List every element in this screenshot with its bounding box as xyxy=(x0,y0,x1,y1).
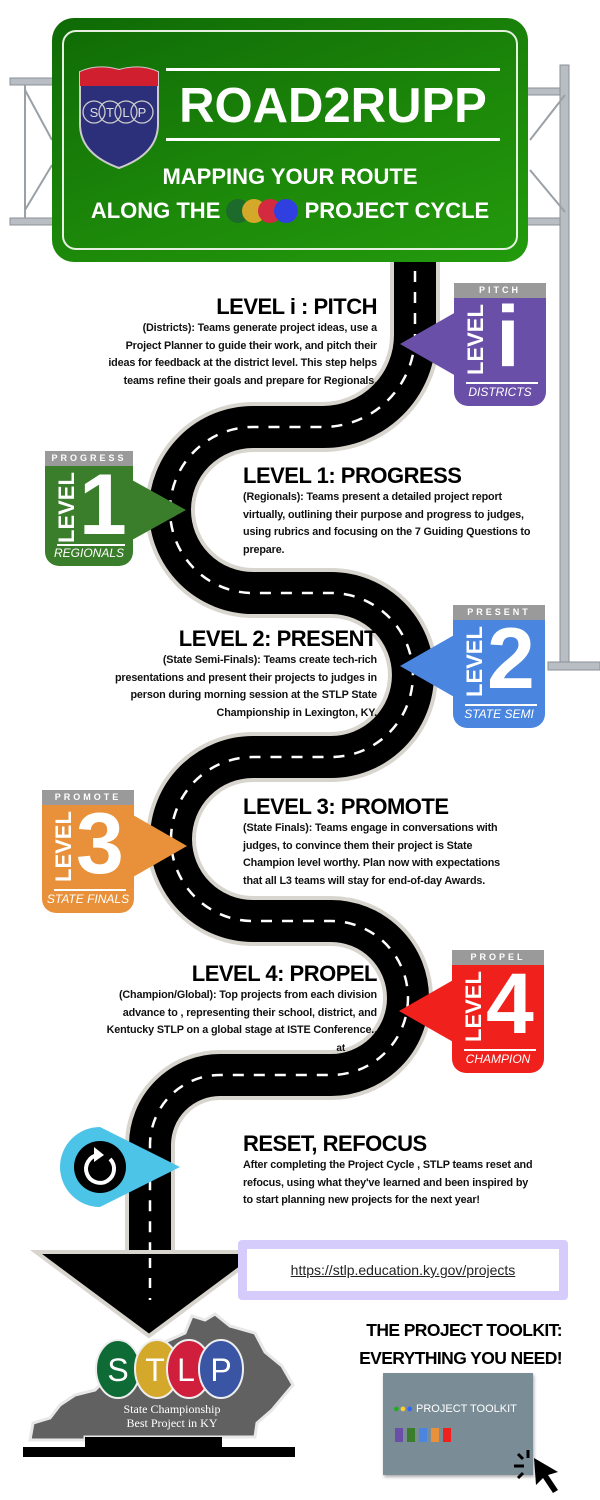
level 1 text: prepare. xyxy=(243,544,284,556)
level 1 text xyxy=(243,463,530,556)
badge: level 3: PROMOTE xyxy=(55,792,121,802)
level 4 text: at xyxy=(336,1042,345,1054)
level 1 text: using rubrics and focusing on the 7 Guiding Questions to xyxy=(243,526,530,538)
level 1 text: (Regionals): Teams present a detailed project report xyxy=(243,491,502,503)
kentucky trophy: T xyxy=(145,1352,165,1388)
badge: level 1: LEVEL xyxy=(54,472,79,543)
kentucky trophy: State Championship xyxy=(124,1402,220,1416)
reset text: After completing the Project Cycle , STLP teams reset and xyxy=(243,1159,532,1171)
badge: level 2 xyxy=(453,605,545,728)
icon: interstate shield: P xyxy=(138,105,146,120)
badge: level i: DISTRICTS xyxy=(468,385,532,399)
badge: level 1 xyxy=(45,451,133,566)
level 2 text: Championship in Lexington, KY. xyxy=(217,706,377,718)
badge: level i: i xyxy=(496,289,520,385)
badge: level 4: PROPEL xyxy=(470,952,526,962)
level 4 text: Kentucky STLP on a global stage at ISTE Conference.. xyxy=(107,1024,377,1036)
level i text xyxy=(108,294,378,386)
badge: level 4: CHAMPION xyxy=(466,1052,530,1066)
level 4 text: (Champion/Global): Top projects from each division xyxy=(119,989,377,1001)
level 1 text: virtually, outlining their purpose and progress to judges, xyxy=(243,508,524,520)
kentucky trophy: Best Project in KY xyxy=(126,1416,218,1430)
level 4 text: advance to , representing their school, district, and xyxy=(123,1006,377,1018)
level 3 text: (State Finals): Teams engage in conversations with xyxy=(243,822,497,834)
kentucky trophy: P xyxy=(210,1352,232,1388)
toolkit thumbnail: ●●● PROJECT TOOLKIT xyxy=(393,1403,517,1415)
url box: https://stlp.education.ky.gov/projects xyxy=(291,1262,515,1278)
badge: level 1: PROGRESS xyxy=(51,453,126,463)
badge: level 4 xyxy=(452,950,544,1073)
badge: level 3: 3 xyxy=(76,796,124,892)
reset text: to start planning new projects for the next year! xyxy=(243,1194,480,1206)
reset text xyxy=(243,1131,532,1206)
level 1 text: LEVEL 1: PROGRESS xyxy=(243,463,461,488)
badge: level i: LEVEL xyxy=(463,304,488,375)
subtitle: ALONG THE PROJECT CYCLE xyxy=(91,198,489,223)
kentucky trophy: S xyxy=(107,1352,129,1388)
icon: interstate shield: L xyxy=(122,105,130,120)
badge: level 3: LEVEL xyxy=(51,811,76,882)
badge: level 2: 2 xyxy=(487,611,535,707)
toolkit heading: THE PROJECT TOOLKIT: xyxy=(366,1320,562,1340)
header sign xyxy=(52,18,528,262)
level 2 text: (State Semi-Finals): Teams create tech-rich xyxy=(163,654,377,666)
level 3 text: LEVEL 3: PROMOTE xyxy=(243,794,449,819)
badge: level i: PITCH xyxy=(479,285,521,295)
badge: level 3: STATE FINALS xyxy=(47,892,129,906)
level i text: LEVEL i : PITCH xyxy=(216,294,377,319)
toolkit heading: EVERYTHING YOU NEED! xyxy=(359,1348,562,1368)
level i text: Project Planner to guide their work, and pitch their xyxy=(126,340,377,352)
sign structure: poles and trusses xyxy=(10,64,600,670)
subtitle xyxy=(91,164,489,223)
level 4 text xyxy=(107,961,377,1054)
icon: reset pin xyxy=(60,1127,180,1207)
icon: interstate shield: T xyxy=(106,105,114,120)
icon: interstate shield xyxy=(79,66,159,169)
level 3 text xyxy=(242,794,500,886)
badge: level 2: LEVEL xyxy=(462,626,487,697)
level 2 text: presentations and present their projects to judges in xyxy=(115,672,377,684)
badge: level 1: REGIONALS xyxy=(54,546,124,560)
toolkit thumbnail xyxy=(383,1373,533,1475)
level 2 text: person during morning session at the STLP State xyxy=(130,689,377,701)
kentucky trophy: L xyxy=(177,1352,195,1388)
big arrow xyxy=(36,1252,262,1336)
toolkit heading xyxy=(359,1320,562,1368)
subtitle: MAPPING YOUR ROUTE xyxy=(162,164,418,189)
icon: cursor xyxy=(514,1450,558,1493)
level 3 text: judges, to convince them their project is State xyxy=(243,840,472,852)
badge: level 2: STATE SEMI xyxy=(464,707,534,721)
badge: level 4: 4 xyxy=(486,956,534,1052)
url box xyxy=(238,1240,568,1300)
level 2 text: LEVEL 2: PRESENT xyxy=(179,626,377,651)
level i text: teams refine their goals and prepare for Regionals. xyxy=(124,374,377,386)
badge: level 4: LEVEL xyxy=(461,971,486,1042)
level 3 text: that all L3 teams will stay for end-of-day Awards. xyxy=(243,874,485,886)
reset text: refocus, using what they've learned and been inspired by xyxy=(243,1176,528,1188)
level 3 text: Champion level worthy. Plan now with expectations xyxy=(243,857,500,869)
kentucky trophy xyxy=(23,1312,295,1457)
reset text: RESET, REFOCUS xyxy=(243,1131,427,1156)
badge: level 1: 1 xyxy=(79,457,127,553)
level i text: (Districts): Teams generate project ideas, use a xyxy=(143,322,377,334)
level 2 text xyxy=(115,626,377,718)
icon: interstate shield: S xyxy=(90,105,99,120)
level 4 text: LEVEL 4: PROPEL xyxy=(192,961,377,986)
badge: level 2: PRESENT xyxy=(467,607,531,617)
badge: level i xyxy=(454,283,546,406)
badge: level 3 xyxy=(42,790,134,913)
level i text: ideas for feedback at the district level. This step helps xyxy=(108,357,377,369)
title: ROAD2RUPP xyxy=(179,79,487,133)
